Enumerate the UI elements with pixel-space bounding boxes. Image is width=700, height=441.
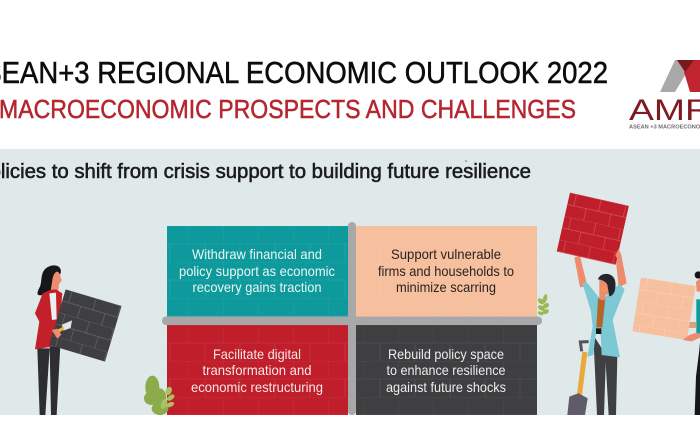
speck (465, 160, 467, 162)
quadrant: rebuild policy space: Rebuild policy space (388, 346, 504, 362)
figure: woman lifting red bricks (557, 193, 629, 415)
quadrant: support vulnerable: firms and households to (378, 263, 514, 279)
jacket (35, 289, 62, 349)
belt (596, 328, 601, 334)
quadrant: withdraw support: Withdraw financial and (192, 246, 322, 262)
hand (615, 249, 621, 262)
shovel (567, 342, 589, 415)
quadrant: withdraw support: policy support as economic (179, 263, 335, 279)
hand (52, 329, 61, 339)
quadrant: rebuild policy space: to enhance resilience (386, 362, 506, 378)
legs (593, 335, 606, 415)
quadrant: rebuild policy space: against future shocks (386, 379, 506, 395)
quadrant: withdraw support: recovery gains traction (192, 279, 322, 295)
quadrant: digital transformation: transformation and (202, 362, 312, 378)
legs (695, 335, 700, 415)
logo: AMRO (629, 60, 700, 130)
head (696, 278, 700, 292)
legs (37, 348, 50, 415)
torso (696, 299, 700, 336)
head (599, 280, 609, 301)
subtitle: MACROECONOMIC PROSPECTS AND CHALLENGES (0, 94, 576, 124)
top (596, 298, 605, 327)
hair (38, 265, 61, 295)
horizontal divider (162, 316, 542, 325)
logo mark (660, 60, 700, 92)
quadrant: support vulnerable (356, 226, 537, 317)
arm (35, 294, 56, 331)
peach brick board (632, 277, 696, 340)
quadrant: digital transformation: economic restructuring (191, 379, 323, 395)
arms (574, 256, 587, 287)
shirt (49, 293, 57, 320)
vertical divider (348, 222, 356, 415)
right figures group (537, 193, 700, 415)
brick board (49, 289, 122, 362)
plant: right sprig (537, 294, 550, 316)
quadrant: digital transformation (167, 325, 348, 415)
quadrant: withdraw support (167, 226, 348, 317)
quadrant: rebuild policy space (356, 325, 537, 415)
quadrant: support vulnerable: Support vulnerable (391, 246, 501, 262)
figure: woman with dark bricks and trowel (35, 265, 122, 415)
plant: left bush (144, 376, 176, 415)
trowel (57, 320, 72, 333)
hair (598, 274, 615, 296)
quadrant: support vulnerable: minimize scarring (396, 279, 496, 295)
jacket (583, 281, 625, 357)
rear arm (689, 322, 697, 328)
hand (683, 333, 700, 341)
head (50, 271, 62, 293)
panel: policy matrix (162, 222, 542, 415)
earring (602, 287, 606, 291)
quadrant: digital transformation: Facilitate digital (213, 346, 301, 362)
panel: policy background (0, 149, 700, 415)
red brick board (557, 193, 629, 265)
figure: man holding peach bricks (632, 271, 700, 415)
